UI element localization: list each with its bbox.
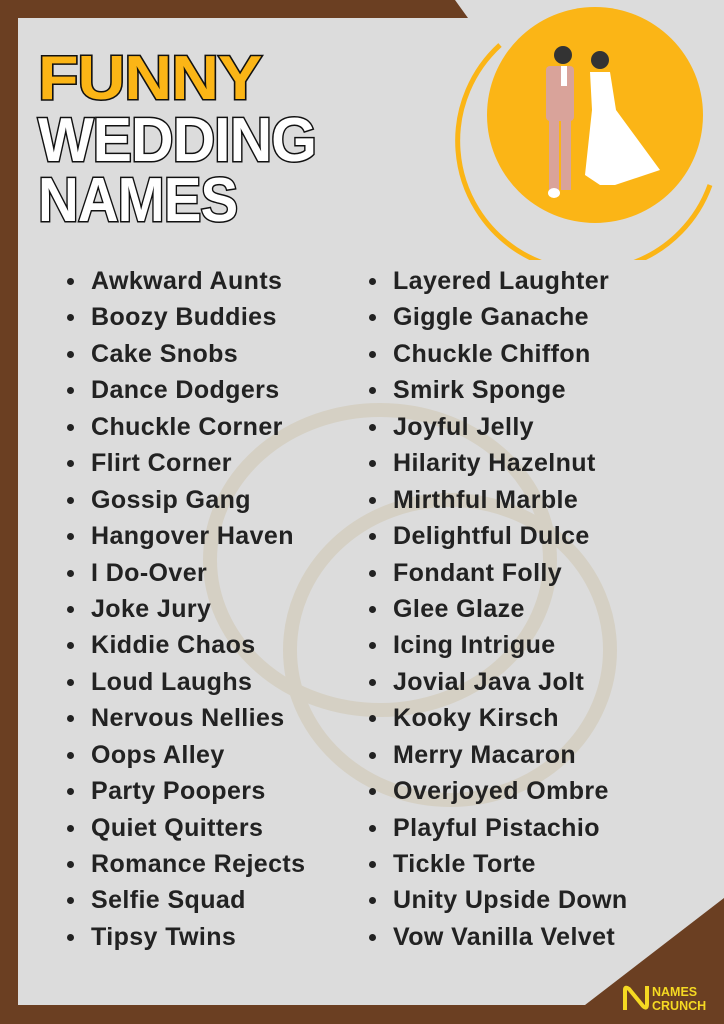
title: WEDDING: [38, 106, 316, 175]
left name list: Gossip Gang: [91, 486, 251, 514]
right name list: Vow Vanilla Velvet: [393, 923, 615, 951]
title: [36, 44, 316, 235]
right name list: Jovial Java Jolt: [393, 668, 584, 696]
right name list: Icing Intrigue: [393, 631, 556, 659]
left name list: Party Poopers: [91, 777, 266, 805]
logo: CRUNCH: [652, 999, 706, 1013]
right name list: Joyful Jelly: [393, 413, 534, 441]
left name list: Oops Alley: [91, 741, 225, 769]
left name list: Kiddie Chaos: [91, 631, 256, 659]
logo: [623, 985, 706, 1013]
left name list: Tipsy Twins: [91, 923, 236, 951]
left name list: Joke Jury: [91, 595, 211, 623]
right name list: Delightful Dulce: [393, 522, 590, 550]
right name list: Giggle Ganache: [393, 303, 589, 331]
left name list: Flirt Corner: [91, 449, 232, 477]
logo: NAMES: [652, 985, 697, 999]
left name list: Boozy Buddies: [91, 303, 277, 331]
right name list: Smirk Sponge: [393, 376, 566, 404]
left name list: Quiet Quitters: [91, 814, 263, 842]
left name list: Romance Rejects: [91, 850, 305, 878]
left name list: Hangover Haven: [91, 522, 294, 550]
right name list: Tickle Torte: [393, 850, 536, 878]
left name list: Cake Snobs: [91, 340, 238, 368]
groom: [546, 46, 574, 198]
right name list: Kooky Kirsch: [393, 704, 559, 732]
right name list: [369, 267, 628, 951]
right name list: Chuckle Chiffon: [393, 340, 591, 368]
left name list: Awkward Aunts: [91, 267, 282, 295]
right name list: Overjoyed Ombre: [393, 777, 609, 805]
left name list: Selfie Squad: [91, 886, 246, 914]
illustration: couple in circle: [455, 7, 712, 260]
right name list: Playful Pistachio: [393, 814, 600, 842]
title: FUNNY: [38, 44, 261, 113]
title: NAMES: [38, 166, 237, 235]
left name list: Loud Laughs: [91, 668, 252, 696]
right name list: Mirthful Marble: [393, 486, 578, 514]
left name list: Nervous Nellies: [91, 704, 285, 732]
bride: [585, 51, 660, 185]
right name list: Layered Laughter: [393, 267, 609, 295]
right name list: Glee Glaze: [393, 595, 525, 623]
left name list: I Do-Over: [91, 558, 207, 586]
left name list: Chuckle Corner: [91, 413, 283, 441]
left name list: Dance Dodgers: [91, 376, 280, 404]
left name list: [67, 267, 305, 951]
right name list: Unity Upside Down: [393, 886, 628, 914]
right name list: Fondant Folly: [393, 558, 562, 586]
right name list: Merry Macaron: [393, 741, 576, 769]
right name list: Hilarity Hazelnut: [393, 449, 596, 477]
